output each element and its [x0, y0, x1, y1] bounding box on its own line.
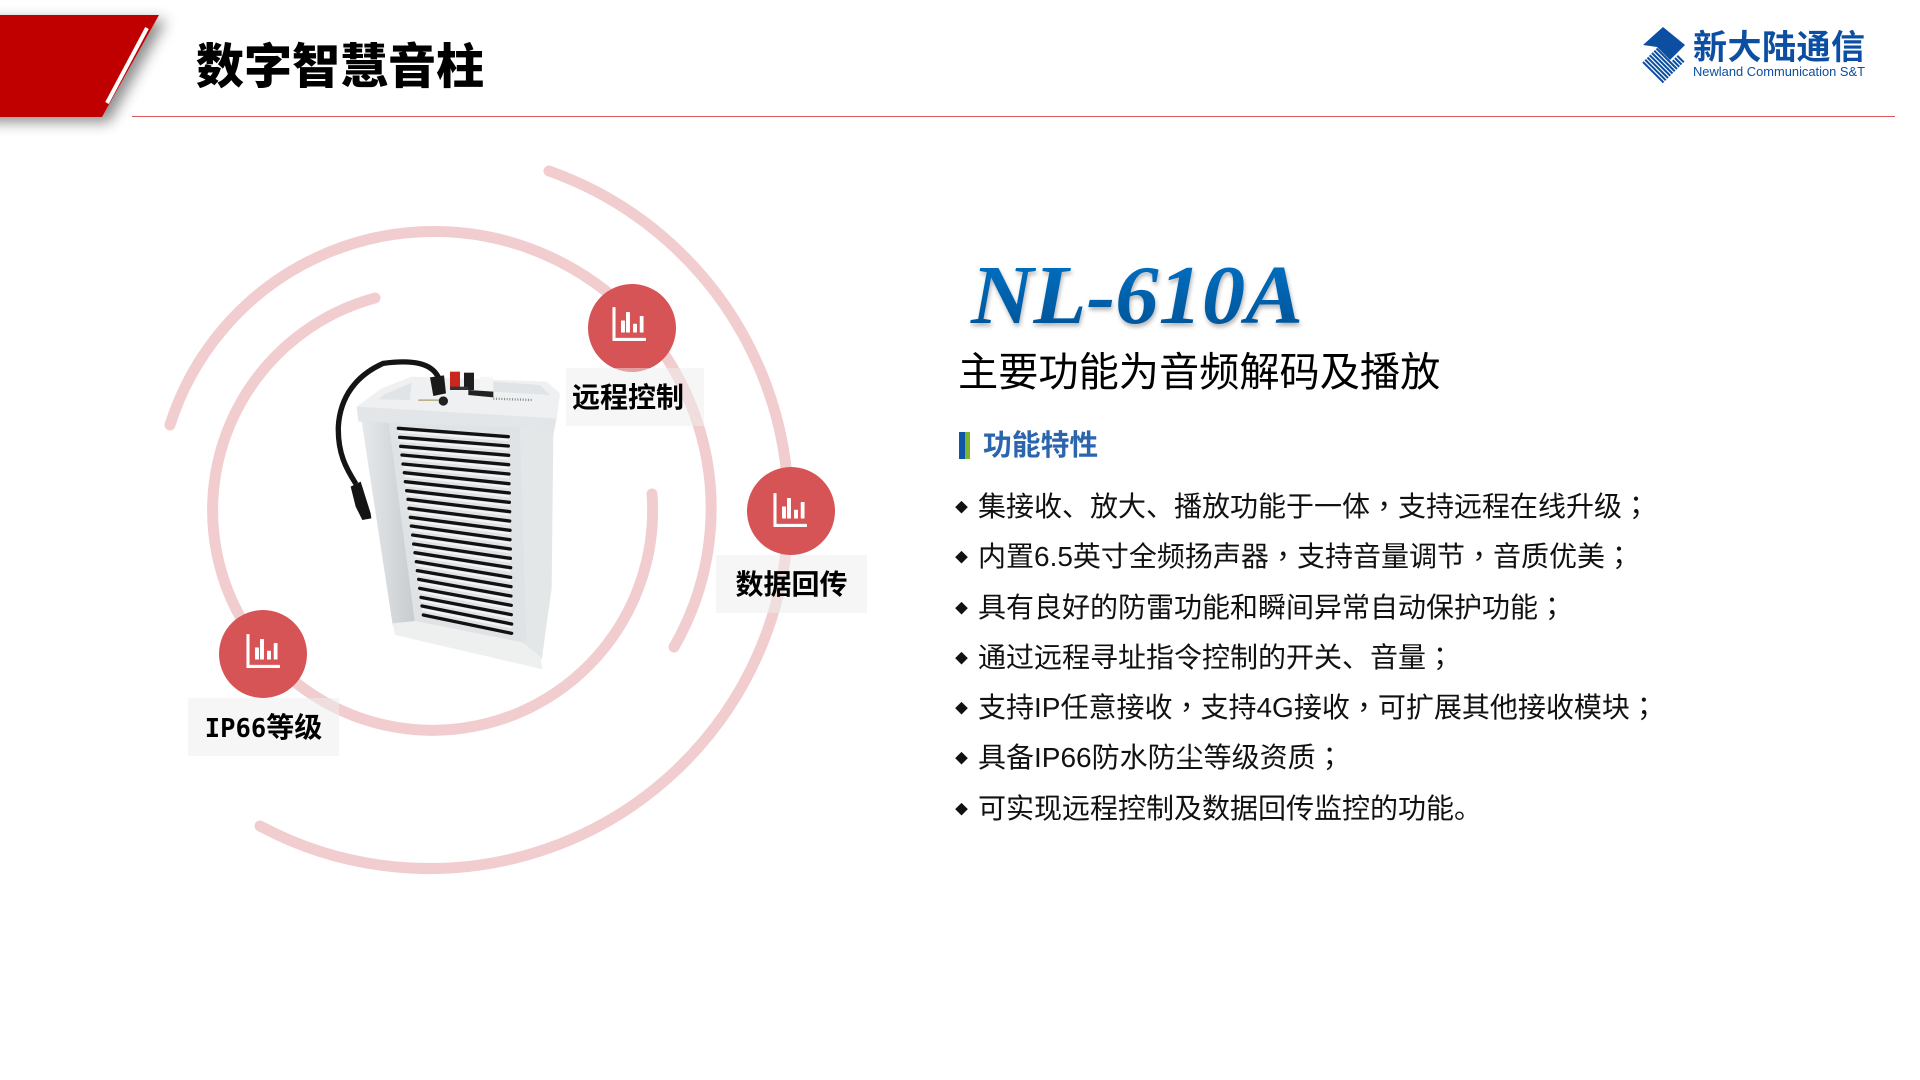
- header rule: [132, 116, 1895, 117]
- feature 3: ◆: [955, 601, 968, 616]
- speaker product illustration: [336, 359, 560, 670]
- feature 5: 支持IP任意接收，支持4G接收，可扩展其他接收模块；: [978, 686, 1658, 726]
- feature 6: 具备IP66防水防尘等级资质；: [978, 736, 1344, 776]
- logo: Newland Communication: [1642, 20, 1865, 84]
- callout: IP66 icon: [219, 610, 307, 698]
- label: IP66 rating: IP66等级: [205, 712, 322, 744]
- feature 2: 内置6.5英寸全频扬声器，支持音量调节，音质优美；: [978, 535, 1633, 575]
- concentric arcs: [164, 166, 792, 874]
- header banner: red parallelogram: [0, 10, 171, 132]
- feature 5: ◆: [955, 701, 968, 716]
- label: data return: [716, 555, 867, 613]
- title: 数字智慧音柱: [196, 41, 484, 94]
- label: data return: 数据回传: [735, 569, 848, 600]
- product model name: NL-610A: [970, 249, 1303, 342]
- callout: data return icon: [747, 467, 835, 555]
- label: remote control: 远程控制: [572, 382, 684, 413]
- feature 1: ◆: [955, 500, 968, 515]
- subtitle: 主要功能为音频解码及播放: [958, 350, 1440, 395]
- section marker bar: [959, 432, 970, 459]
- logo: Newland Communication: 新大陆通信: [1693, 20, 1865, 69]
- feature 4: 通过远程寻址指令控制的开关、音量；: [978, 636, 1454, 676]
- feature 6: ◆: [955, 751, 968, 766]
- feature 7: ◆: [955, 802, 968, 817]
- label: IP66 rating: [188, 698, 339, 756]
- feature 7: 可实现远程控制及数据回传监控的功能。: [978, 793, 1482, 824]
- callout: remote control icon: [588, 284, 676, 372]
- section heading: features: 功能特性: [983, 430, 1098, 462]
- feature 2: ◆: [955, 550, 968, 565]
- feature 4: ◆: [955, 651, 968, 666]
- label: remote control: [566, 368, 704, 426]
- feature 3: 具有良好的防雷功能和瞬间异常自动保护功能；: [978, 586, 1566, 626]
- logo: Newland Communication: Newland Communication S&T: [1693, 64, 1865, 79]
- feature 1: 集接收、放大、播放功能于一体，支持远程在线升级；: [978, 485, 1650, 525]
